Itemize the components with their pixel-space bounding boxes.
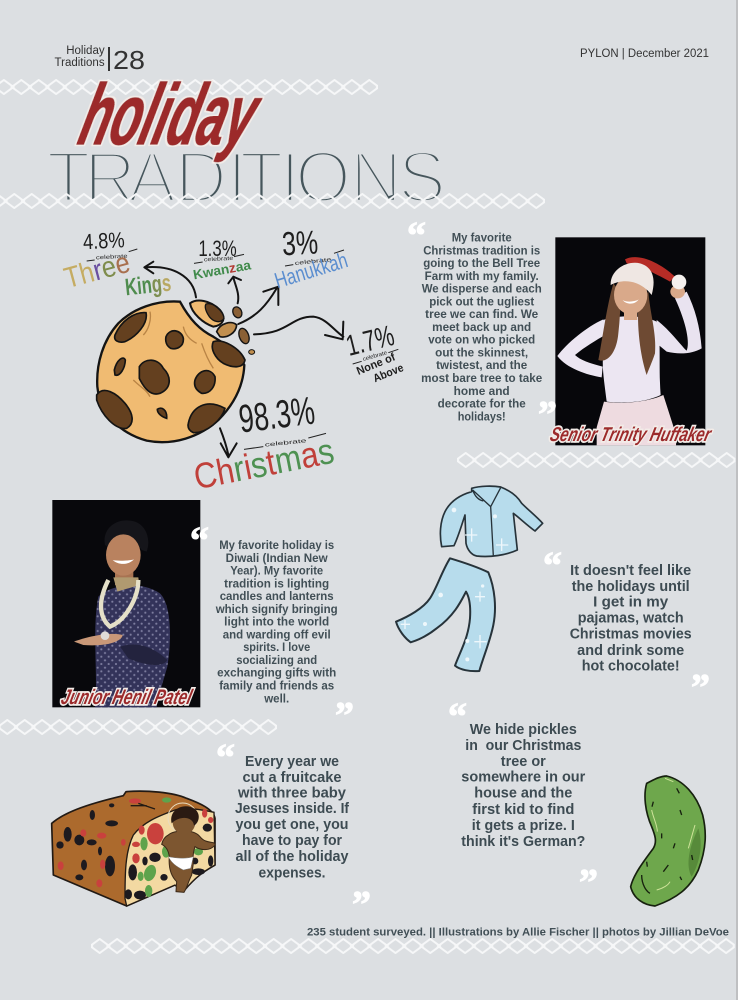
quote: fruitcake: have to pay for <box>242 833 342 849</box>
quote: Trinity Huffaker: decorate for the <box>438 398 526 410</box>
quote: fruitcake: ” <box>352 884 371 926</box>
stat: Christmas 98.3% <box>190 389 337 497</box>
stat: Hanukkah 3%: 3% <box>281 224 319 263</box>
quote: fruitcake: with three baby <box>237 785 346 801</box>
stat: Kwanzaa 1.3% <box>192 236 253 282</box>
section label: Holiday Traditions 28: 28 <box>113 45 145 75</box>
quote: pickle <box>448 696 598 904</box>
quote: Henil Patel: My favorite holiday is <box>219 539 334 552</box>
stat: None of Above 1.7%: Above <box>372 362 405 385</box>
quote: Henil Patel: light into the world <box>224 616 329 629</box>
quote: pickle: first kid to find <box>472 802 574 818</box>
quote: Henil Patel: tradition is lighting <box>224 577 329 590</box>
illustration: fruitcake with baby <box>52 791 215 906</box>
cookie illustration <box>97 301 255 442</box>
heading word: holiday: holiday <box>71 66 271 163</box>
quote: Trinity Huffaker: home and <box>454 385 510 398</box>
quote: fruitcake: cut a fruitcake <box>242 770 342 786</box>
quote: Henil Patel: “ <box>190 520 209 562</box>
quote: pajamas: It doesn't feel like <box>570 563 691 579</box>
quote: Henil Patel: and warding off evil <box>223 628 331 641</box>
quote: Henil Patel: family and friends as <box>219 680 334 692</box>
quote: Henil Patel: candles and lanterns <box>220 590 334 603</box>
stat: None of Above 1.7% <box>343 319 405 385</box>
quote: Trinity Huffaker: twistest, and the <box>436 359 528 372</box>
quote: Henil Patel: Diwali (Indian New <box>226 552 329 565</box>
quote: pickle: house and the <box>474 786 572 802</box>
stat: Three Kings 4.8%: Three <box>61 246 134 295</box>
quote: pickle: We hide pickles <box>470 722 577 738</box>
quote: fruitcake: expenses. <box>258 865 326 881</box>
quote: pajamas: the holidays until <box>572 579 690 595</box>
quote: pajamas: and drink some <box>577 643 684 659</box>
quote: Trinity Huffaker: holidays! <box>458 410 506 423</box>
quote: Trinity Huffaker: tree we can find. We <box>425 308 539 321</box>
quote: Trinity Huffaker: Christmas tradition is <box>423 244 540 257</box>
illustration: pickle <box>631 776 705 906</box>
quote: pickle: it gets a prize. I <box>472 818 575 834</box>
quote: pickle: think it's German? <box>461 834 585 850</box>
quote: Henil Patel: exchanging gifts with <box>217 667 336 680</box>
stat: Kwanzaa 1.3%: celebrate <box>204 256 233 263</box>
quote: pickle: in our Christmas <box>465 738 581 754</box>
photo: Trinity Huffaker <box>555 237 705 445</box>
quote: pickle: “ <box>448 696 467 738</box>
arrow to None of Above <box>254 317 343 339</box>
illustration: pajamas <box>396 486 543 671</box>
quote: Henil Patel: which signify bringing <box>215 603 338 616</box>
quote: pickle: somewhere in our <box>461 770 586 786</box>
quote: Trinity Huffaker: meet back up and <box>432 321 531 334</box>
quote: pajamas: hot chocolate! <box>582 659 680 675</box>
stat: Three Kings 4.8%: celebrate <box>96 254 128 261</box>
quote: pajamas: “ <box>543 545 562 587</box>
stat: Kwanzaa 1.3%: Kwanzaa <box>192 257 253 282</box>
section label: Holiday Traditions 28: Traditions <box>55 57 105 69</box>
quote: fruitcake: Every year we <box>245 754 339 770</box>
pajama shirt <box>440 486 543 556</box>
stat: Three Kings 4.8%: Kings <box>124 270 172 301</box>
stat: None of Above 1.7%: celebrate <box>362 350 388 363</box>
photo: Henil Patel <box>52 500 200 707</box>
quote: pajamas: Christmas movies <box>570 626 692 642</box>
quote: Henil Patel: ” <box>335 695 354 737</box>
quote: Trinity Huffaker: pick out the ugliest <box>429 295 534 308</box>
quote: Henil Patel: spirits. I love <box>243 641 311 654</box>
baby figure <box>162 803 215 892</box>
stat: None of Above 1.7%: None of <box>355 351 397 378</box>
stat: Three Kings 4.8% <box>61 227 172 301</box>
arrow to Christmas <box>220 428 237 457</box>
arrow to Three Kings <box>144 262 196 297</box>
quote: Henil Patel: Year). My favorite <box>230 565 324 578</box>
quote: fruitcake <box>216 737 371 926</box>
quote: Trinity Huffaker: out the skinnest, <box>435 346 528 360</box>
quote: fruitcake: all of the holiday <box>236 849 348 865</box>
quote: pajamas <box>543 545 710 709</box>
quote: Henil Patel: socializing and <box>236 654 317 667</box>
quote: Trinity Huffaker <box>407 215 543 423</box>
pajama pants <box>396 558 495 671</box>
stat: Hanukkah 3%: celebrate <box>295 257 332 267</box>
stat: Hanukkah 3%: Hanukkah <box>271 247 351 293</box>
quote: fruitcake: “ <box>216 737 235 779</box>
quote: Trinity Huffaker: vote on who picked <box>428 334 535 347</box>
quote: fruitcake: you get one, you <box>236 817 348 833</box>
stat: Christmas 98.3%: Christmas <box>190 430 337 497</box>
closing quote mark for Trinity Huffaker: ” <box>538 394 557 436</box>
stat: Christmas 98.3%: 98.3% <box>236 389 317 442</box>
credits line: 235 student surveyed. || Illustrations by Allie Fischer || photos by Jillian DeVoe <box>307 926 729 938</box>
arrow to Hanukkah <box>238 287 278 324</box>
caption: Junior Henil Patel: Junior Henil Patel <box>59 685 195 709</box>
quote: pickle: tree or <box>501 754 546 770</box>
stat: None of Above 1.7%: 1.7% <box>343 319 398 363</box>
quote: Trinity Huffaker: Farm with my family. <box>425 270 539 283</box>
quote: Trinity Huffaker: most bare tree to take <box>421 372 543 385</box>
cookie infographic <box>61 224 405 497</box>
stat: Kwanzaa 1.3%: 1.3% <box>198 236 237 261</box>
stat: Hanukkah 3% <box>271 224 351 293</box>
quote: Henil Patel <box>190 520 354 737</box>
quote: pajamas: I get in my <box>593 595 668 611</box>
quote: Henil Patel: well. <box>263 692 289 705</box>
quote: Trinity Huffaker: My favorite <box>452 232 512 244</box>
quote: pajamas: pajamas, watch <box>578 611 684 627</box>
quote: pajamas: ” <box>691 667 710 709</box>
arrow to Kwanzaa <box>228 277 241 303</box>
stat: Three Kings 4.8%: 4.8% <box>82 227 125 254</box>
quote: Trinity Huffaker: going to the Bell Tree <box>423 257 541 270</box>
quote: Trinity Huffaker: “ <box>407 215 426 257</box>
quote: pickle: ” <box>579 862 598 904</box>
section label: Holiday Traditions 28 <box>55 45 145 75</box>
publication line: PYLON | December 2021 <box>580 48 709 60</box>
quote: fruitcake: Jesuses inside. If <box>235 801 349 817</box>
heading word: TRADITIONS: TRADITIONS <box>46 138 446 218</box>
stat: Christmas 98.3%: celebrate <box>265 438 307 449</box>
section label: Holiday Traditions 28: Holiday <box>66 45 105 57</box>
quote: Trinity Huffaker: We disperse and each <box>422 283 542 296</box>
